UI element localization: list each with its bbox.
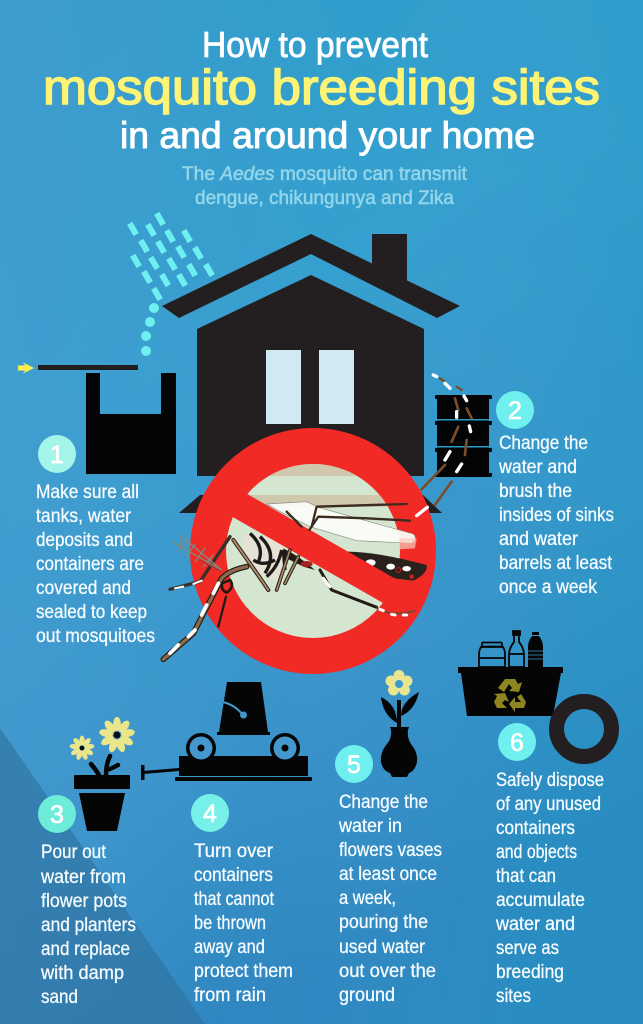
text 6: that can (496, 866, 556, 887)
sign bar (231, 491, 401, 603)
vase (381, 727, 417, 777)
text 4: away and (194, 937, 265, 958)
badge 4: 4 (203, 800, 217, 828)
upper hind legs (287, 504, 410, 530)
text 5: water in (338, 816, 402, 837)
subtitle (182, 164, 468, 209)
text 5 (338, 792, 442, 1006)
text 5: pouring the (339, 912, 428, 933)
no sign with mosquito (163, 375, 472, 674)
text 6: and objects (496, 842, 577, 863)
badge 1: 1 (50, 441, 64, 469)
subtitle: The Aedes mosquito can transmit (182, 164, 468, 185)
text 2 (498, 433, 614, 598)
text 5: used water (339, 937, 426, 958)
basket (458, 667, 563, 716)
sign ring (190, 428, 436, 674)
text 3: Pour out (41, 842, 107, 863)
front left legs (163, 537, 247, 659)
text 6 (495, 770, 604, 1007)
text 1: out mosquitoes (36, 626, 155, 647)
text 5: a week, (339, 888, 396, 909)
icon: flower pot (69, 717, 135, 831)
text 3: with damp (40, 963, 124, 984)
sign inner (226, 464, 400, 638)
icon: covered tank (18, 362, 176, 474)
house floor (179, 495, 442, 513)
text 6: accumulate (496, 890, 585, 911)
text 3: and planters (41, 915, 136, 936)
lower right leg (320, 570, 415, 615)
badge 4 (191, 794, 229, 832)
flower (386, 670, 412, 696)
text 4: protect them (194, 961, 293, 982)
text 5: ground (339, 985, 395, 1006)
text 1: tanks, water (36, 506, 132, 527)
step 3 (38, 795, 136, 1008)
step 5 (335, 745, 442, 1006)
text 2: brush the (499, 481, 572, 502)
house windows (266, 350, 354, 424)
step 4 (191, 794, 293, 1006)
badge 5 (335, 745, 373, 783)
text 4: be thrown (194, 913, 266, 934)
text 5: out over the (339, 961, 436, 982)
text 4: containers (194, 865, 273, 886)
mosquito body under bar (243, 502, 427, 581)
title line 3: in and around your home (120, 115, 535, 156)
jar (479, 642, 505, 667)
title line 2: mosquito breeding sites (43, 61, 600, 115)
badge 3 (38, 795, 76, 833)
text 2: once a week (499, 577, 597, 598)
badge 6 (498, 723, 536, 761)
text 6: serve as (496, 938, 559, 959)
text 3: water from (40, 867, 126, 888)
text 1: sealed to keep (36, 602, 147, 623)
bucket (219, 682, 268, 732)
trailer bed (179, 756, 308, 776)
plastic bottle (528, 632, 543, 667)
small daisy (69, 736, 95, 761)
badge 1 (38, 435, 76, 473)
title line 1: How to prevent (202, 24, 428, 65)
antenna (172, 535, 222, 570)
stem and leaves (381, 692, 419, 728)
icon: house (162, 234, 460, 513)
text 5: flowers vases (339, 840, 442, 861)
text 1: Make sure all (36, 482, 139, 503)
text 1: covered and (36, 578, 131, 599)
text 6: water and (495, 914, 575, 935)
house chimney (372, 234, 407, 290)
step 2 (496, 391, 614, 598)
middle legs (233, 540, 298, 590)
badge 2: 2 (508, 397, 522, 425)
text 1: containers are (36, 554, 144, 575)
text 2: water and (498, 457, 577, 478)
tyre (556, 702, 612, 756)
subtitle: dengue, chikungunya and Zika (195, 188, 454, 209)
text 4: from rain (194, 985, 266, 1006)
house body (197, 275, 424, 476)
text 6: Safely dispose (496, 770, 604, 791)
text 5: Change the (339, 792, 428, 813)
recycling symbol (494, 679, 526, 712)
badge 2 (496, 391, 534, 429)
right legs over barrel (417, 375, 472, 516)
text 6: of any unused (496, 794, 601, 815)
text 1 (36, 482, 155, 647)
text 3: flower pots (41, 891, 127, 912)
text 5: at least once (339, 864, 437, 885)
icon: overturned bucket on trailer (141, 682, 312, 781)
icon: water barrel (435, 395, 492, 477)
badge 6: 6 (510, 729, 524, 757)
glass bottle (509, 631, 524, 667)
text 6: containers (496, 818, 575, 839)
title (43, 24, 600, 156)
mosquito legs over sign (163, 375, 472, 659)
text 3: and replace (41, 939, 130, 960)
step 6 (495, 723, 604, 1007)
text 4: that cannot (194, 889, 275, 910)
icon: flower in vase (381, 670, 419, 777)
text 3: sand (41, 987, 78, 1008)
text 4: Turn over (194, 841, 274, 862)
trailer hitch (143, 768, 179, 774)
text 2: and water (499, 529, 579, 550)
text 2: insides of sinks (499, 505, 614, 526)
text 2: Change the (499, 433, 588, 454)
text 2: barrels at least (499, 553, 613, 574)
icon: rain (127, 212, 215, 356)
text 6: breeding (496, 962, 564, 983)
large daisy (99, 717, 135, 753)
text 3 (40, 842, 136, 1008)
pot body (74, 775, 130, 831)
icon: recycling basket and tyre (458, 631, 612, 756)
text 1: deposits and (36, 530, 133, 551)
badge 3: 3 (50, 801, 64, 829)
badge 5: 5 (347, 751, 361, 779)
step 1 (36, 435, 155, 647)
house roof (162, 234, 460, 318)
text 4 (194, 841, 293, 1006)
pot stems (91, 756, 118, 775)
text 6: sites (496, 986, 531, 1007)
trailer wheels (186, 733, 300, 763)
